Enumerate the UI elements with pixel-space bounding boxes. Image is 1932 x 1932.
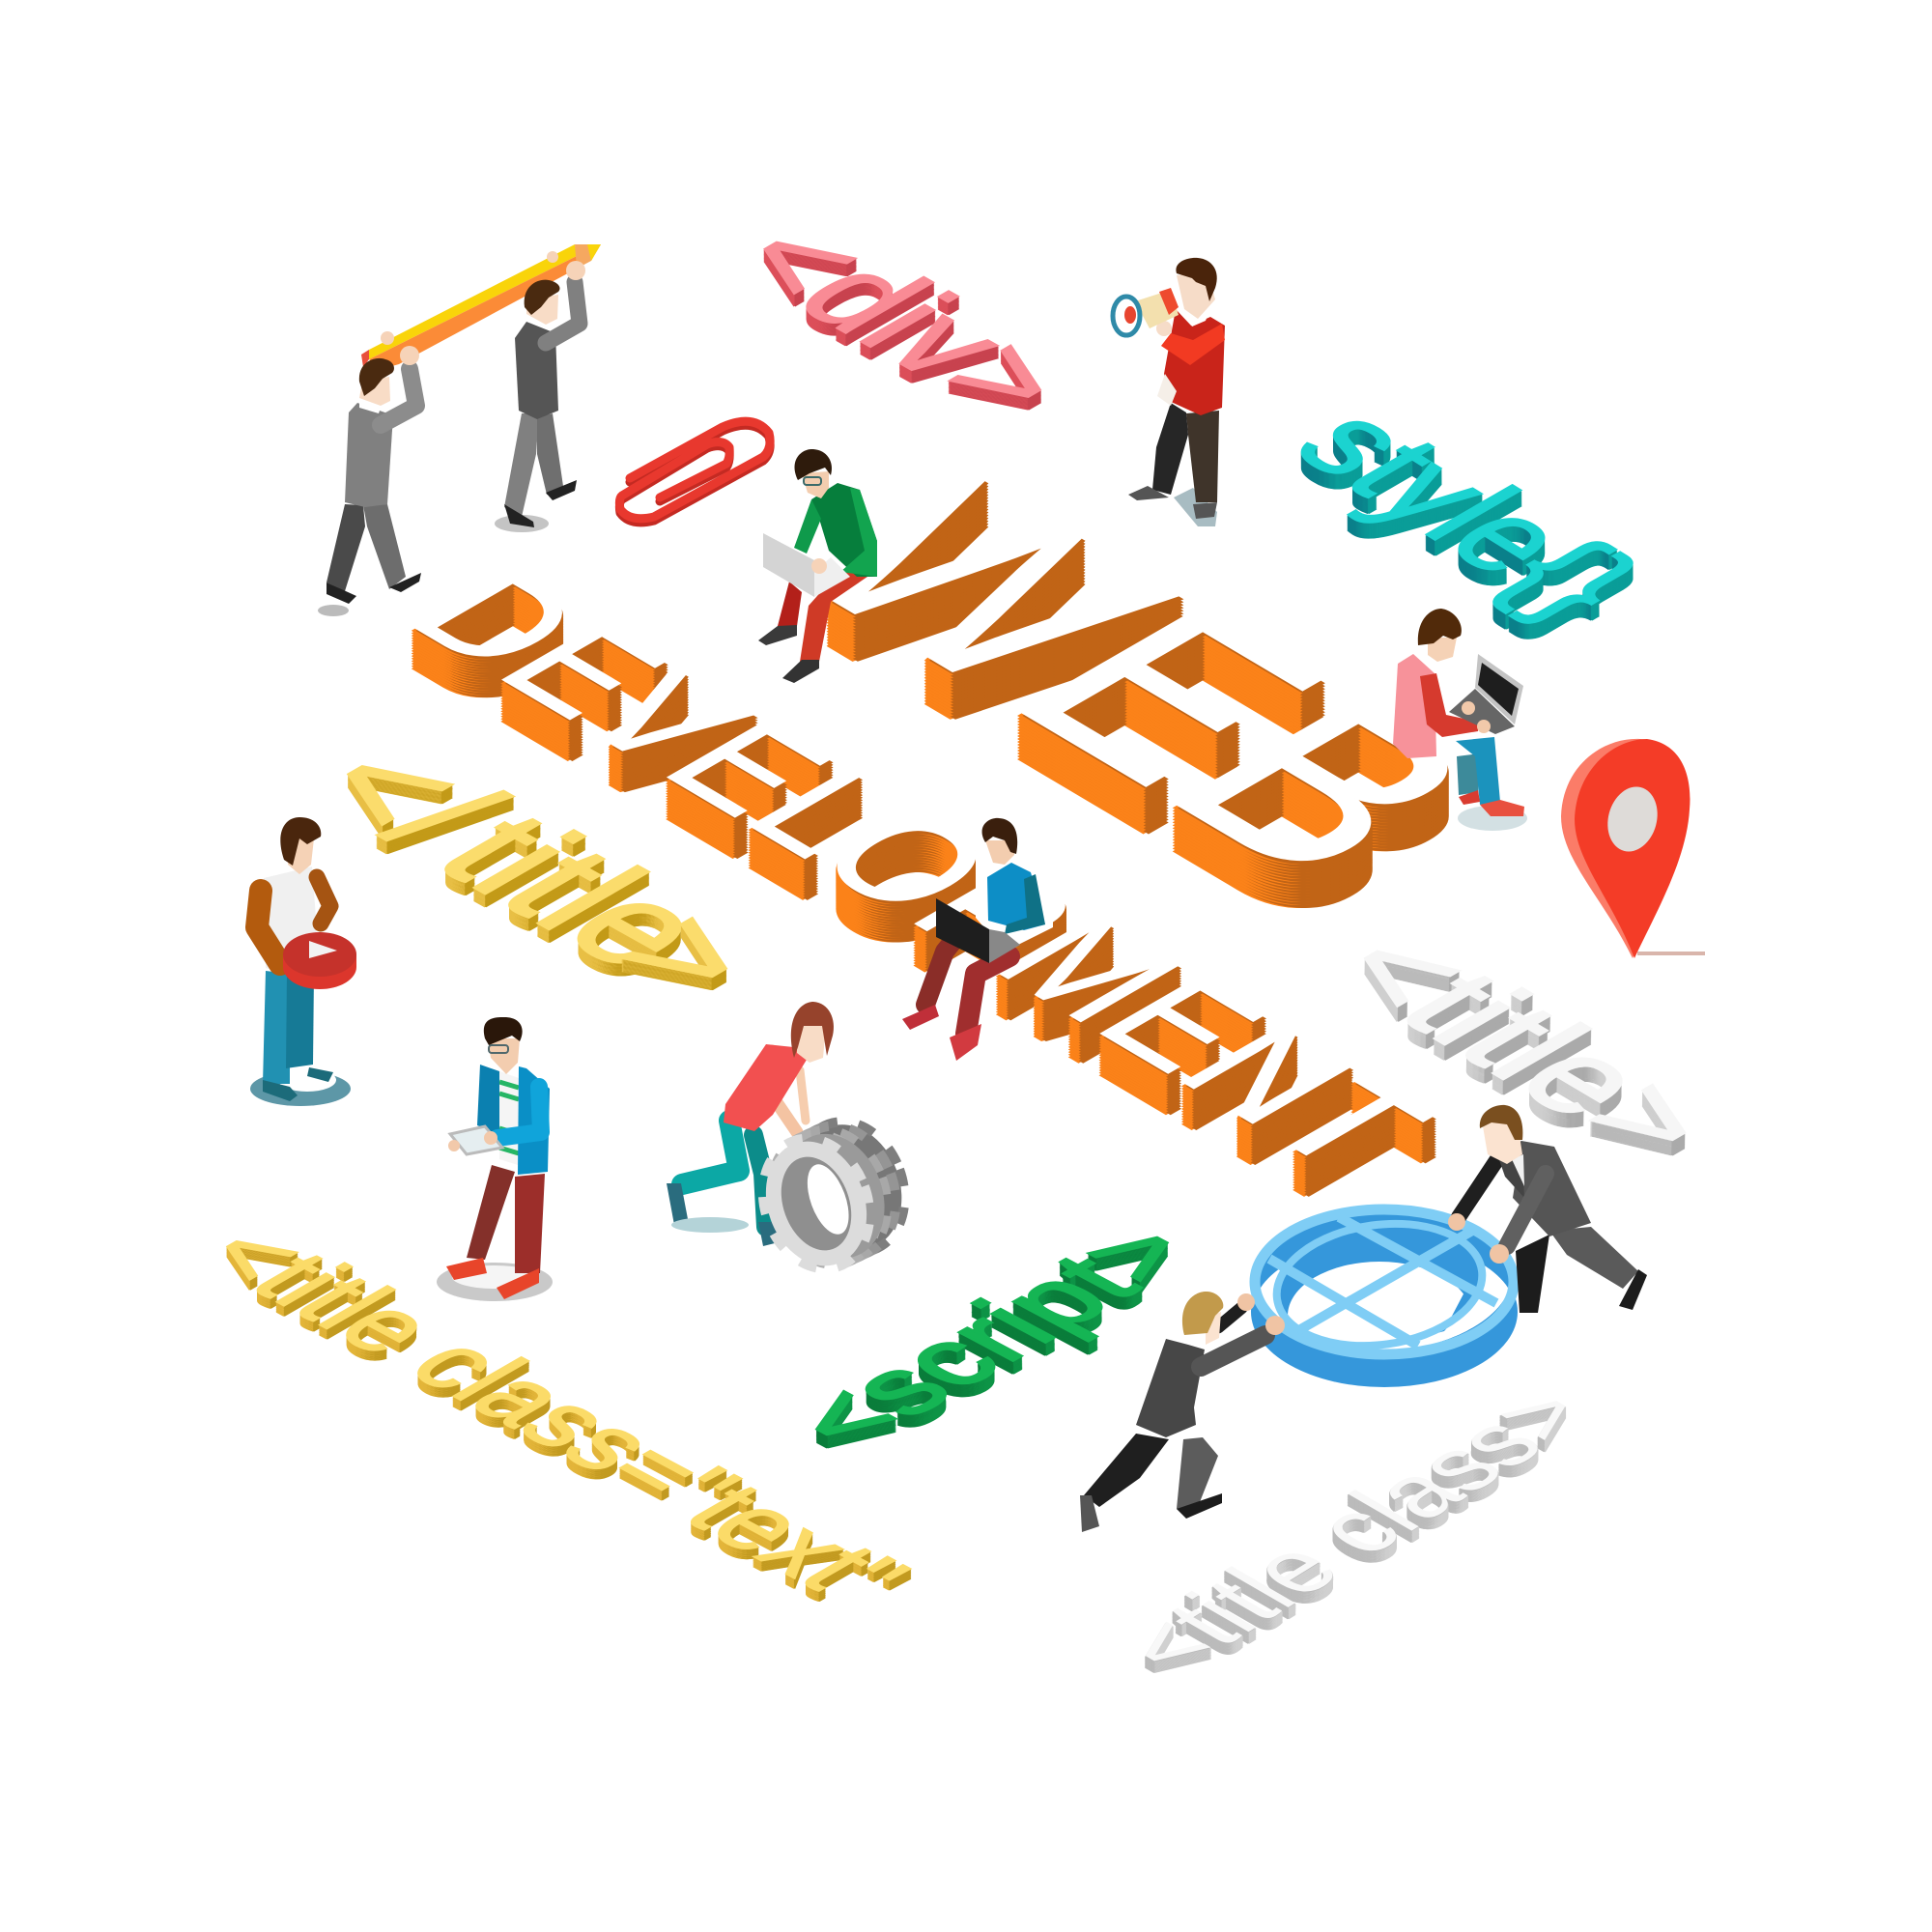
- code tag: style: style{}: [1264, 387, 1673, 637]
- icon: pencil: [361, 244, 601, 369]
- icon: play triangle: [309, 941, 337, 958]
- code tag: script green: <script>: [759, 1207, 1222, 1464]
- code tag: title grey: <title>: [1300, 912, 1753, 1178]
- illustrations layer: [245, 244, 1705, 1532]
- icon: location pin: [1561, 739, 1705, 958]
- icon: gear: [744, 1107, 923, 1284]
- person: woman rolling gear: [667, 1002, 834, 1246]
- person: front man carrying pencil: [318, 331, 421, 616]
- person: green sweater man with laptop: [758, 449, 877, 683]
- person: rear man carrying pencil: [495, 251, 585, 532]
- code tag: title class grey: <title class>: [1096, 1373, 1613, 1689]
- person: pink shirt man with laptop: [1393, 609, 1527, 831]
- person: businessman left pushing globe: [1080, 1292, 1285, 1532]
- person: man with tablet: [437, 1017, 553, 1301]
- person: red jacket man with megaphone: [1113, 258, 1225, 526]
- person: businessman right pushing globe: [1448, 1105, 1647, 1313]
- icon: blue globe: [1251, 1207, 1518, 1387]
- code tag: div: <div>: [699, 202, 1110, 435]
- heading: WEB: WEB: [725, 432, 1549, 917]
- code tag: closing title gold: </title>: [274, 722, 804, 1019]
- person: man with play button: [250, 817, 356, 1106]
- person: blue sweater man with black laptop: [902, 818, 1053, 1061]
- icon: paper clip: [619, 421, 770, 523]
- code tag: title class text gold: <title class= "text": [177, 1210, 934, 1620]
- heading: DEVELOPMENT: DEVELOPMENT: [373, 547, 1467, 1192]
- infographic canvas: [226, 242, 1705, 1673]
